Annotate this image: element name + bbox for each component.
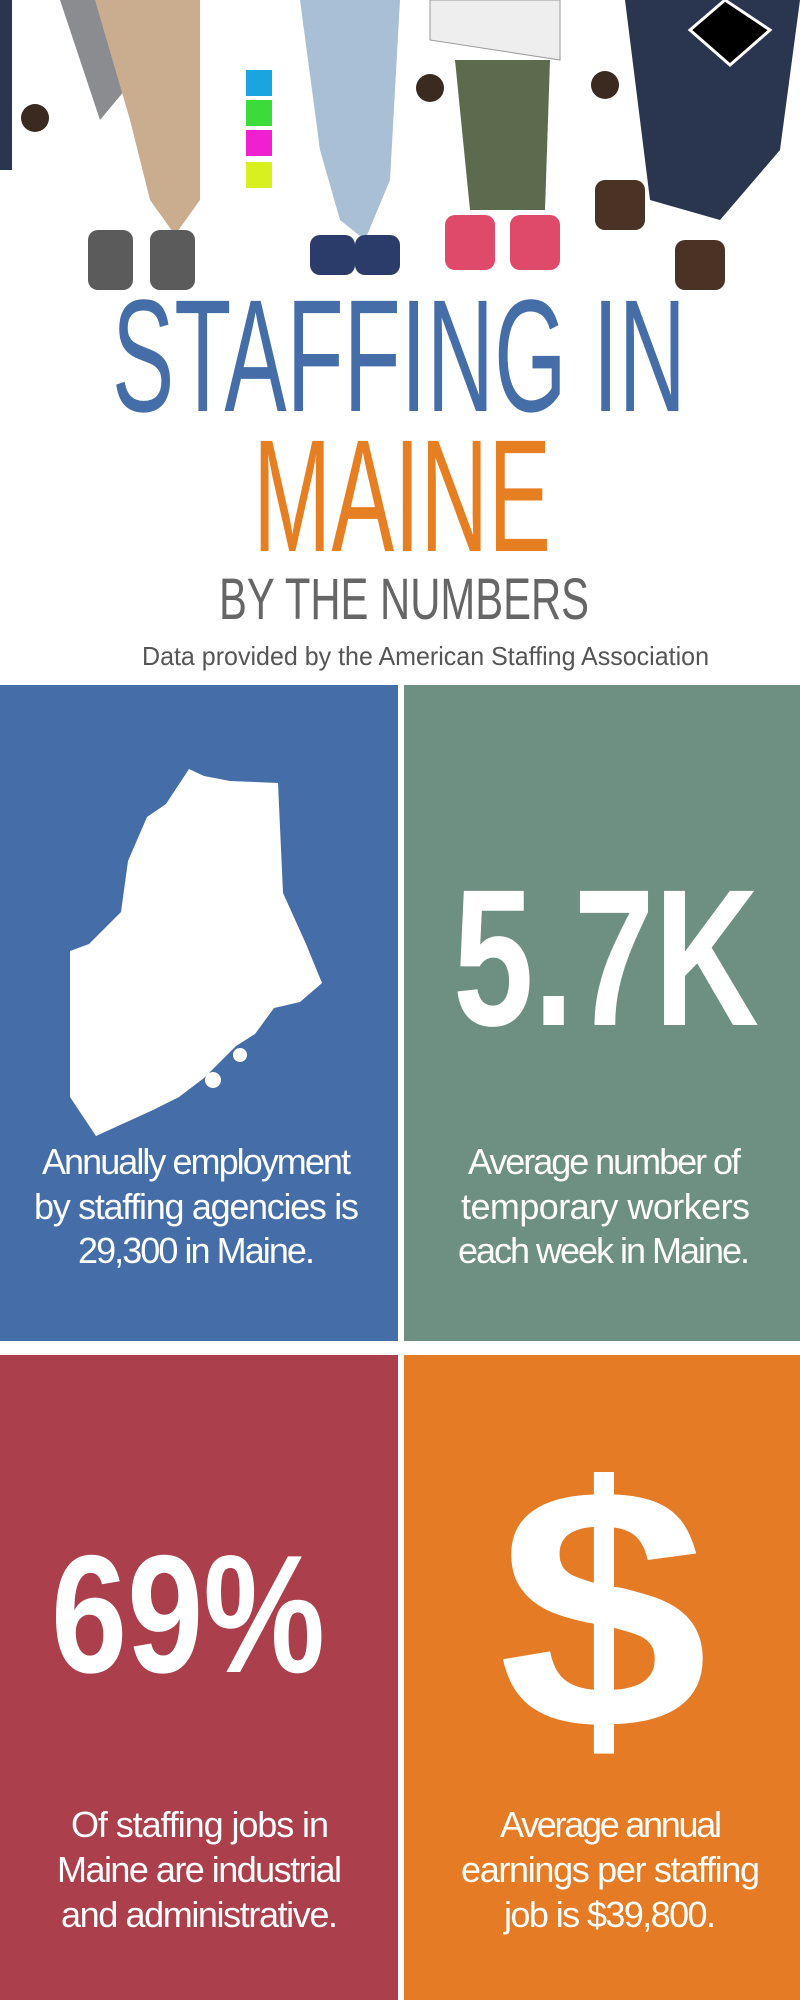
panel: temporary workers bbox=[404, 685, 800, 1341]
icon: Maine map bbox=[70, 769, 322, 1136]
title: MAINE bbox=[253, 406, 551, 585]
panel: industrial share bbox=[0, 1355, 398, 2000]
text: employment: 29,300 in Maine. bbox=[78, 1230, 315, 1271]
icon: dollar sign: $ bbox=[498, 1417, 708, 1802]
title bbox=[112, 266, 686, 585]
text: earnings: job is $39,800. bbox=[503, 1894, 716, 1935]
text: earnings: earnings per staffing bbox=[461, 1849, 760, 1890]
text: industrial: and administrative. bbox=[61, 1894, 338, 1935]
header photo: people legs bbox=[0, 0, 800, 300]
source line: Data provided by the American Staffing Association bbox=[142, 641, 709, 671]
text: temporary: temporary workers bbox=[461, 1186, 750, 1227]
text: industrial: Of staffing jobs in bbox=[71, 1804, 329, 1845]
panel: employment bbox=[0, 685, 398, 1341]
text: employment: Annually employment bbox=[42, 1141, 351, 1182]
text: temporary: Average number of bbox=[468, 1141, 742, 1182]
text: employment: by staffing agencies is bbox=[34, 1186, 359, 1227]
subtitle: BY THE NUMBERS bbox=[219, 567, 589, 632]
panel: earnings bbox=[404, 1355, 800, 2000]
text: temporary: each week in Maine. bbox=[458, 1230, 750, 1271]
stat: 69%: 69% bbox=[51, 1520, 325, 1708]
text: earnings: Average annual bbox=[500, 1804, 722, 1845]
text: industrial: Maine are industrial bbox=[57, 1849, 342, 1890]
